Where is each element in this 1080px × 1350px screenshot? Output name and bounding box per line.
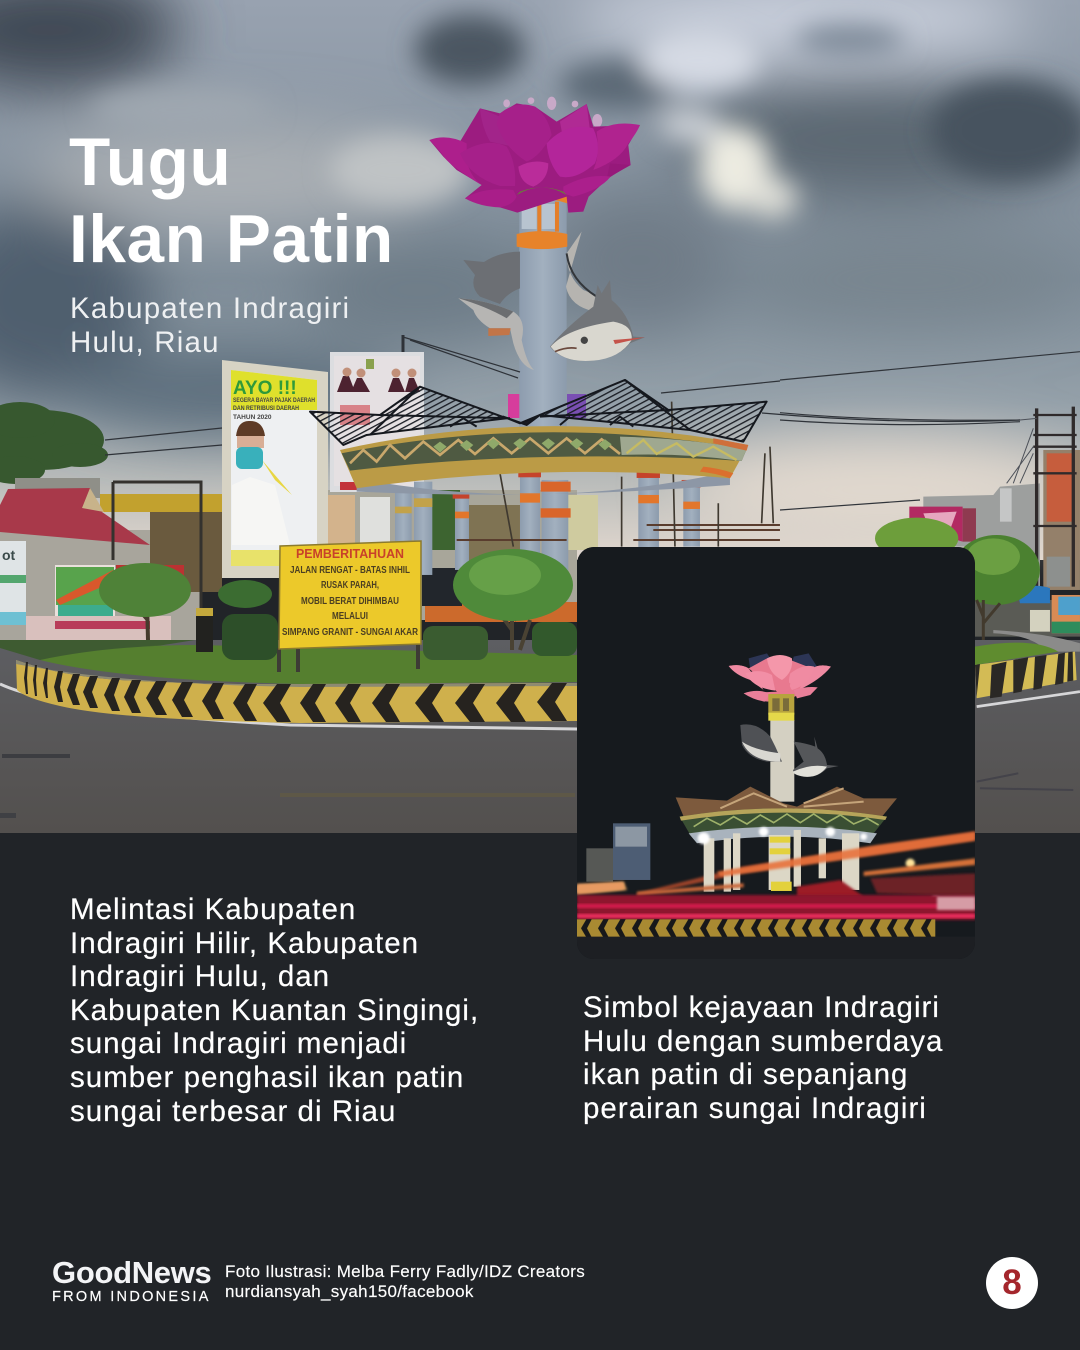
dark bottom panel: [0, 833, 1080, 1350]
right caption: ikan patin di sepanjang: [583, 1058, 908, 1091]
right caption: [583, 991, 944, 1125]
pink and purple signs behind column: [508, 394, 586, 418]
monument columns: [395, 402, 780, 580]
left body text: sumber penghasil ikan patin: [70, 1061, 464, 1094]
billboard: AYO: AYO !!!: [233, 378, 297, 399]
yellow notice board: PEMBERITAHUAN: [296, 546, 404, 561]
night roof: [676, 787, 897, 817]
pavilion backdrop and scaffolding: [325, 490, 598, 622]
night columns: [704, 830, 859, 892]
photo credit: nurdiansyah_syah150/facebook: [225, 1282, 474, 1301]
night pillar: [768, 694, 794, 802]
night ring: [680, 808, 887, 843]
right caption: Simbol kejayaan Indragiri: [583, 991, 940, 1024]
grass island: [40, 645, 577, 684]
night fish: [740, 724, 839, 777]
left tree: [0, 402, 108, 484]
subtitle: [70, 292, 350, 359]
logo: GoodNews from Indonesia: FROM INDONESIA: [52, 1289, 211, 1305]
left body text: Indragiri Hilir, Kabupaten: [70, 927, 419, 960]
photo: roundabout monument with cloudy sky: [0, 0, 1080, 833]
photo credit: [225, 1262, 585, 1301]
page number badge: [986, 1257, 1038, 1309]
hedges and shrubs: [196, 580, 577, 660]
left body text: Indragiri Hulu, dan: [70, 960, 330, 993]
billboard: officials: [330, 352, 424, 492]
yellow notice board: MOBIL BERAT DIHIMBAU: [301, 595, 399, 607]
right caption: perairan sungai Indragiri: [583, 1092, 927, 1125]
background signs: [586, 823, 650, 882]
red light band: [577, 895, 975, 920]
left body text: sungai terbesar di Riau: [70, 1095, 396, 1128]
power lines: [105, 335, 1020, 455]
monument: lotus flower: [429, 97, 640, 213]
billboard: AYO: DAN RETRIBUSI DAERAH: [233, 405, 299, 412]
right caption: Hulu dengan sumberdaya: [583, 1025, 944, 1058]
left body text: sungai Indragiri menjadi: [70, 1027, 407, 1060]
yellow notice board: SIMPANG GRANIT - SUNGAI AKAR: [282, 626, 418, 638]
billboard: AYO: [222, 360, 328, 578]
left body text: [70, 893, 479, 1128]
title: Tugu: [69, 125, 231, 200]
night lotus: [729, 653, 831, 702]
monument: catfish sculptures: [458, 232, 645, 370]
night road: [577, 937, 975, 960]
left buildings and banners: [0, 478, 225, 642]
subtitle: Kabupaten Indragiri: [70, 292, 350, 325]
yellow notice board: RUSAK PARAH,: [321, 579, 379, 591]
light trails front: [577, 832, 975, 897]
left body text: Kabupaten Kuantan Singingi,: [70, 994, 479, 1027]
light glows: [698, 827, 939, 903]
monument: lattice roof wings: [310, 380, 767, 445]
inset photo: monument at night: [577, 547, 975, 959]
photo credit: Foto Ilustrasi: Melba Ferry Fadly/IDZ Creators: [225, 1262, 585, 1281]
trees on island: [99, 549, 573, 650]
yellow notice board: JALAN RENGAT - BATAS INHIL: [290, 564, 410, 576]
title: Ikan Patin: [69, 202, 394, 277]
right side town, trees and kerb: [780, 352, 1080, 790]
billboard: AYO: TAHUN 2020: [233, 414, 272, 421]
road: [0, 640, 1080, 833]
monument: patterned ring pavilion: [340, 426, 748, 495]
road edge line: [0, 684, 577, 729]
title: [69, 125, 394, 277]
subtitle: Hulu, Riau: [70, 326, 220, 359]
left body text: Melintasi Kabupaten: [70, 893, 356, 926]
page number badge: 8: [1002, 1263, 1022, 1302]
left buildings and banners: ot: [2, 547, 16, 563]
trails behind pavilion: [577, 832, 975, 896]
monument: main pillar: [517, 192, 567, 430]
billboard: AYO: SEGERA BAYAR PAJAK DAERAH: [233, 397, 315, 404]
yellow notice board: [277, 541, 421, 672]
chevron kerb: [577, 919, 935, 937]
yellow notice board: MELALUI: [332, 610, 368, 622]
logo: GoodNews from Indonesia: GoodNews: [52, 1255, 212, 1290]
striped kerb: [16, 660, 577, 723]
